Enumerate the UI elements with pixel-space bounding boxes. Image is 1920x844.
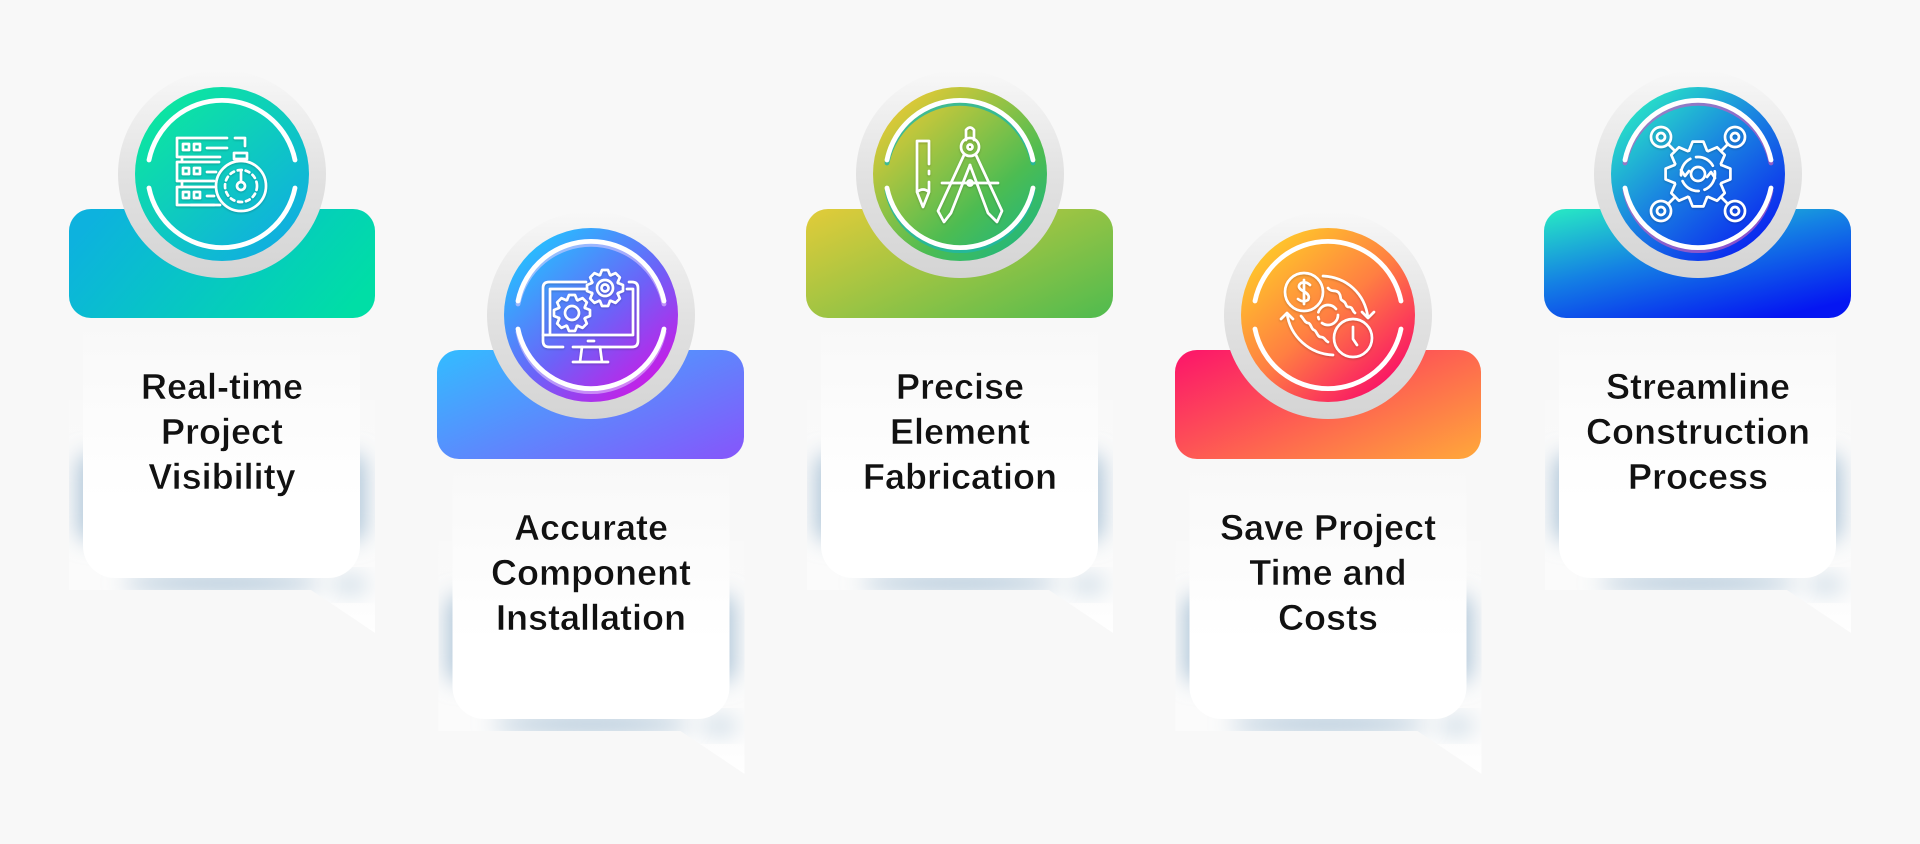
- coloured header bar: [69, 209, 375, 318]
- card: Precise Element Fabrication: [806, 70, 1113, 633]
- icon badge: pencil and compass: [856, 70, 1064, 278]
- coloured header bar: [1544, 209, 1851, 318]
- speech bubble panel: [1176, 441, 1482, 774]
- label line 3: Visibility: [148, 456, 296, 497]
- label line 3: Fabrication: [863, 456, 1057, 497]
- label: Accurate: [514, 507, 668, 548]
- card: Streamline Construction Process: [1544, 70, 1851, 633]
- icon badge: money and time cycle: [1224, 211, 1432, 419]
- label: Precise: [896, 366, 1024, 407]
- label: Save Project: [1220, 507, 1436, 548]
- coloured header bar: [806, 209, 1113, 318]
- label line 2: Time and: [1249, 552, 1407, 593]
- label line 2: Element: [890, 411, 1030, 452]
- speech bubble panel: [438, 441, 744, 774]
- speech bubble panel: [69, 300, 375, 633]
- coloured header bar: [437, 350, 744, 459]
- label: Streamline: [1606, 366, 1790, 407]
- label line 2: Construction: [1586, 411, 1810, 452]
- label line 3: Installation: [496, 597, 686, 638]
- card: Real-time Project Visibility: [69, 70, 375, 633]
- speech bubble panel: [1545, 300, 1851, 633]
- icon badge: gear network: [1594, 70, 1802, 278]
- coloured header bar: [1175, 350, 1481, 459]
- label: Real-time: [141, 366, 303, 407]
- label line 2: Project: [161, 411, 283, 452]
- label line 3: Costs: [1278, 597, 1378, 638]
- card: Save Project Time and Costs: [1175, 211, 1482, 774]
- card: Accurate Component Installation: [437, 211, 744, 774]
- label line 2: Component: [491, 552, 691, 593]
- icon badge: monitor with gears: [487, 211, 695, 419]
- speech bubble panel: [807, 300, 1113, 633]
- icon badge: server rack with stopwatch: [118, 70, 326, 278]
- label line 3: Process: [1628, 456, 1768, 497]
